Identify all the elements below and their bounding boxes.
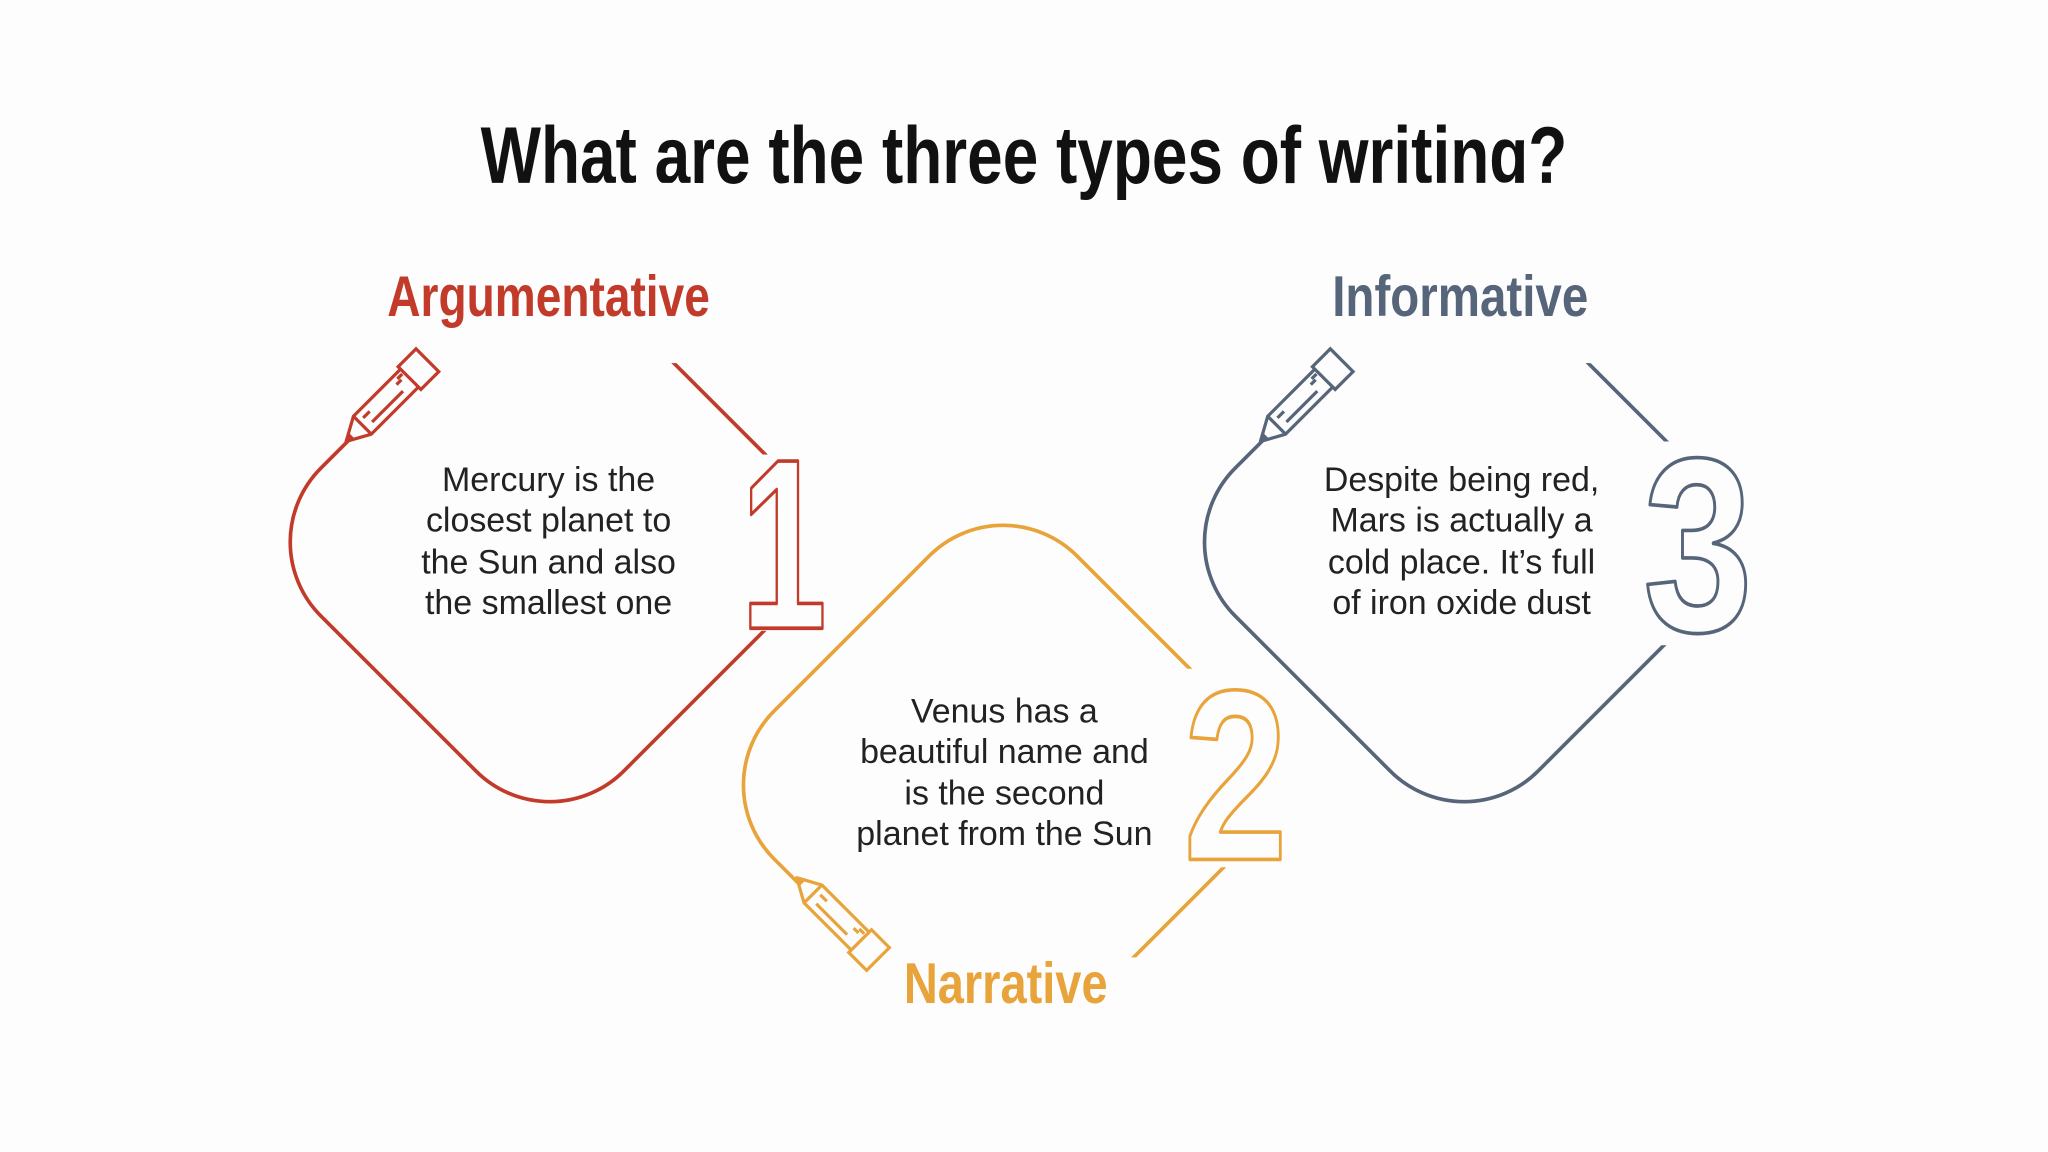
- icon: pencil 2: [785, 866, 889, 970]
- panel: narrative: [700, 482, 1306, 1147]
- text: mercury: Mercury is the: [442, 461, 655, 499]
- text: mercury: the smallest one: [425, 584, 672, 622]
- icon: pencil 3: [1249, 349, 1353, 453]
- number 1: 1: [741, 409, 827, 680]
- text: venus: planet from the Sun: [856, 815, 1153, 853]
- text: mars: of iron oxide dust: [1332, 584, 1591, 622]
- text: mars: cold place. It’s full: [1328, 543, 1595, 581]
- title: What are the three types of writing?: [481, 111, 1567, 201]
- panel: argumentative: [247, 183, 853, 845]
- icon: pencil 1: [335, 349, 439, 453]
- heading: Narrative: Narrative: [904, 952, 1108, 1016]
- diamond outline 1: [247, 239, 853, 845]
- text: venus: beautiful name and: [860, 733, 1149, 771]
- number 2: 2: [1183, 640, 1288, 911]
- text: mars: Mars is actually a: [1330, 502, 1593, 540]
- heading: Argumentative: Argumentative: [387, 265, 710, 329]
- number 3: 3: [1643, 406, 1753, 684]
- text: mars: Despite being red,: [1324, 461, 1599, 499]
- text: mercury: closest planet to: [426, 502, 671, 540]
- panel: informative: [1161, 183, 1767, 845]
- diamond outline 3: [1161, 239, 1767, 845]
- text: venus: is the second: [904, 775, 1104, 813]
- text: mercury: the Sun and also: [421, 543, 676, 581]
- text: venus: Venus has a: [911, 692, 1098, 730]
- diamond outline 2: [700, 482, 1306, 1088]
- heading: Informative: Informative: [1332, 265, 1588, 329]
